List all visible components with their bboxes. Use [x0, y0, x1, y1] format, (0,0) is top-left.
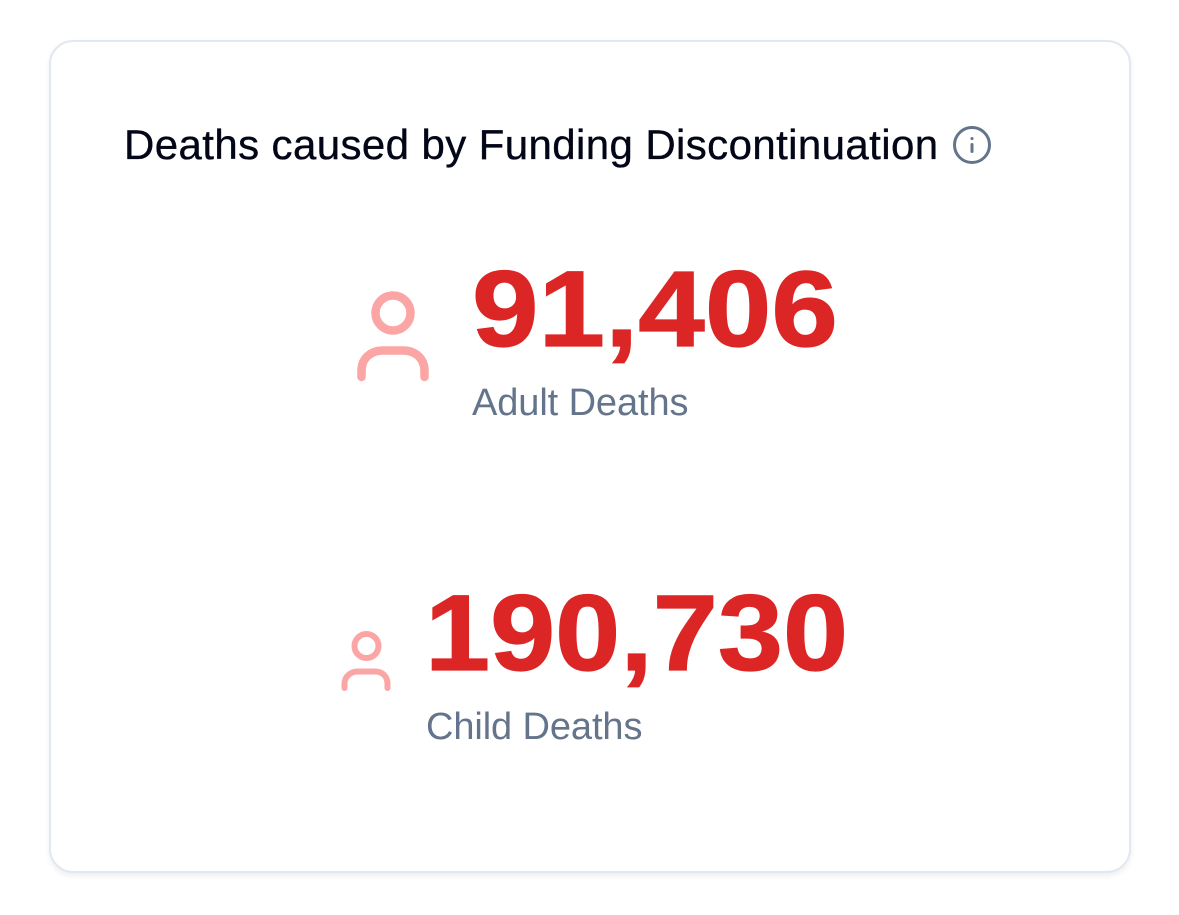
icon: info: [953, 126, 991, 164]
stat: adult deaths number: 91,406: [472, 248, 838, 369]
title: Deaths caused by Funding Discontinuation: [124, 121, 938, 168]
stat: child deaths number: 190,730: [425, 572, 848, 693]
stat: adult deaths label: Adult Deaths: [472, 382, 688, 424]
icon: adult person: [357, 291, 429, 382]
stat: child deaths label: Child Deaths: [426, 706, 642, 748]
icon: child person: [342, 631, 390, 691]
